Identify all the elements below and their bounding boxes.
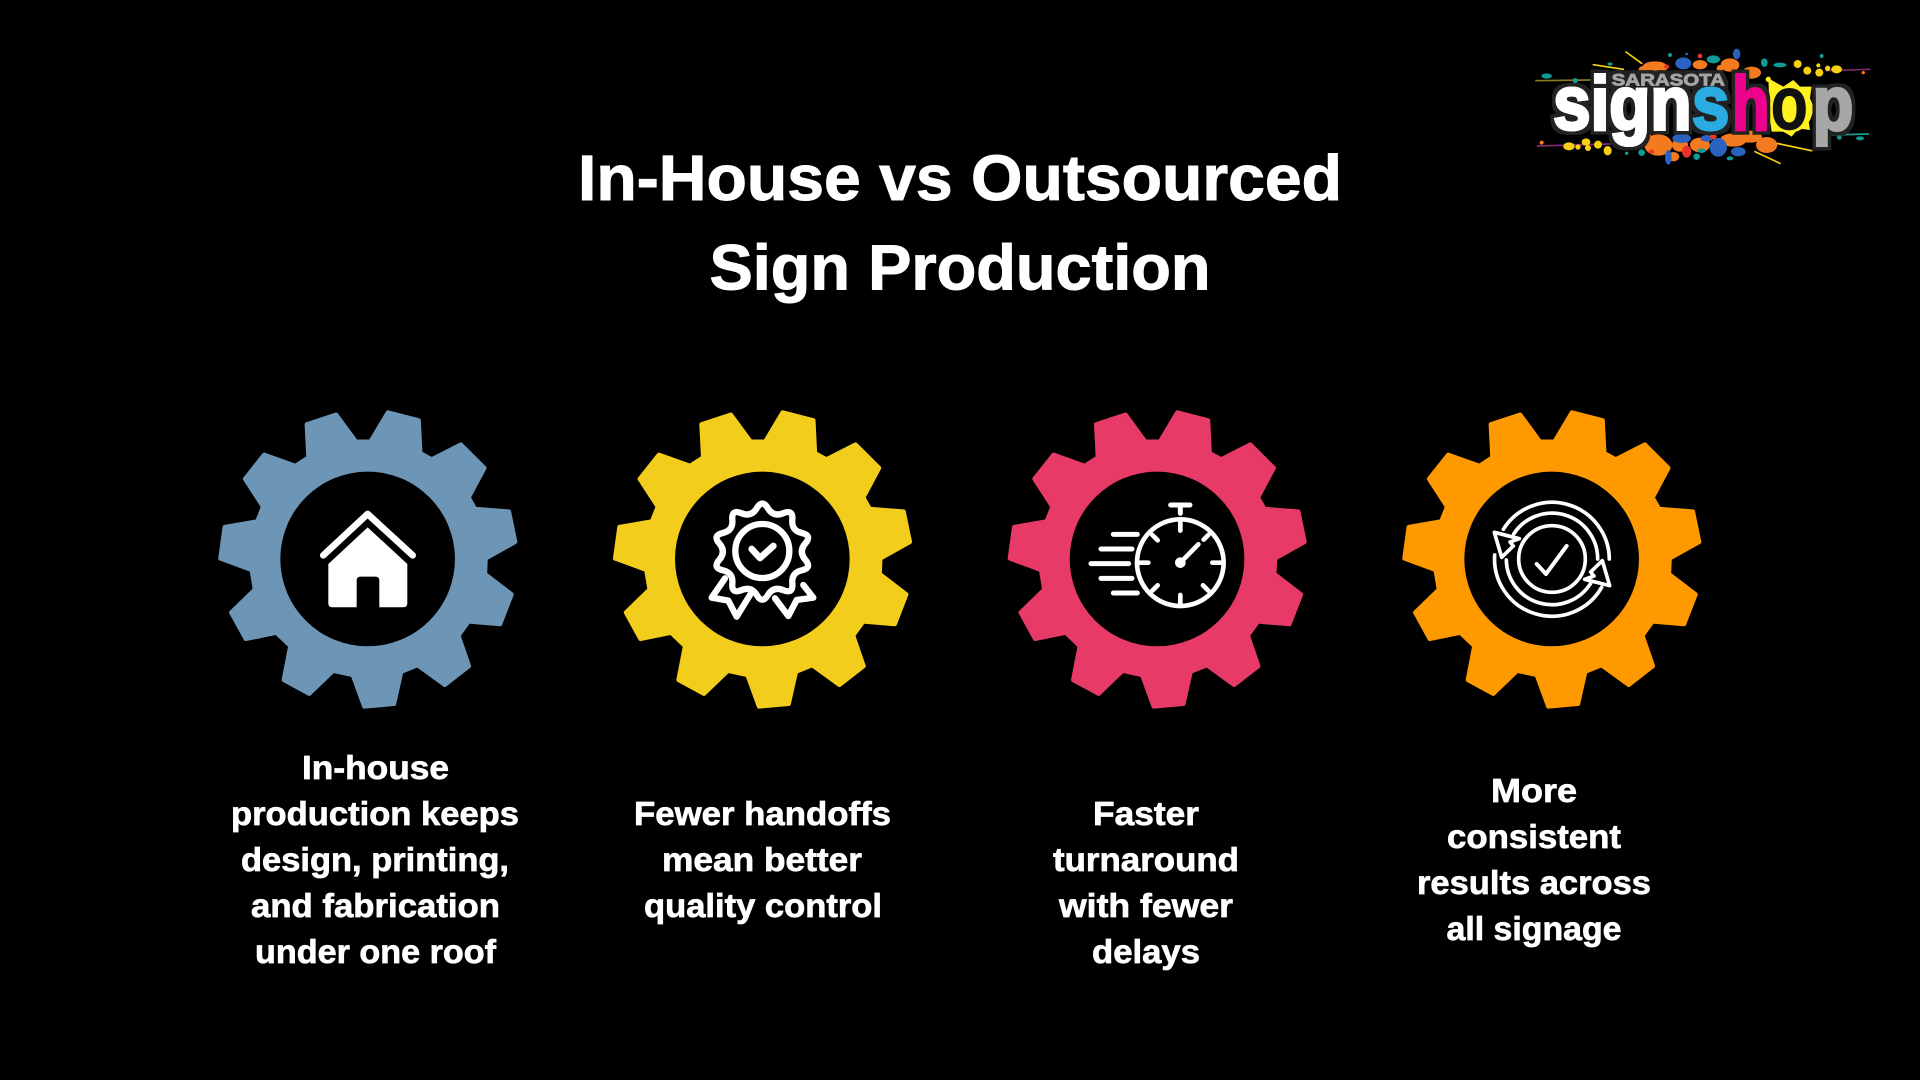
text: consistent results: More — [1491, 772, 1577, 809]
text: consistent results: consistent — [1447, 818, 1621, 855]
logo wordmark: sign — [1553, 63, 1691, 147]
text: faster turnaround — [1053, 795, 1239, 970]
panel: consistent results — [1405, 413, 1699, 947]
title — [578, 142, 1342, 304]
text: in-house production — [231, 749, 519, 970]
icon: stopwatch — [1091, 505, 1224, 606]
text: in-house production: production keeps — [231, 795, 519, 832]
panel: in-house production — [221, 413, 519, 970]
logo wordmark: h — [1732, 63, 1769, 147]
logo yellow splash — [1763, 77, 1815, 137]
text: quality control: mean better — [662, 841, 862, 878]
icon: house — [323, 514, 413, 607]
logo paint splatter — [1536, 49, 1870, 165]
text: quality control: Fewer handoffs — [634, 795, 891, 832]
text: consistent results: results across — [1417, 864, 1651, 901]
icon: award badge — [712, 504, 813, 617]
text: in-house production: design, printing, — [241, 841, 509, 878]
text: faster turnaround: with fewer — [1058, 887, 1233, 924]
text: consistent results: all signage — [1446, 910, 1622, 947]
logo wordmark: SARASOTA — [1612, 70, 1725, 89]
logo wordmark — [1553, 63, 1853, 147]
logo wordmark: p — [1813, 63, 1853, 147]
gear: blue — [221, 413, 515, 706]
text: quality control — [634, 795, 891, 924]
gear: yellow — [615, 413, 910, 706]
title: In-House vs Outsourced — [578, 142, 1342, 214]
gear: orange — [1405, 413, 1699, 706]
icon: cycle with checkmark — [1494, 502, 1610, 616]
logo: Sarasota Sign Shop — [1536, 49, 1870, 165]
title: Sign Production — [710, 232, 1210, 304]
text: faster turnaround: turnaround — [1053, 841, 1239, 878]
text: faster turnaround: Faster — [1093, 795, 1199, 832]
panel: faster turnaround — [1010, 413, 1304, 970]
logo letter o: o — [1771, 63, 1808, 147]
text: in-house production: under one roof — [255, 933, 497, 970]
text: consistent results — [1417, 772, 1651, 947]
text: in-house production: In-house — [302, 749, 449, 786]
text: quality control: quality control — [644, 887, 882, 924]
text: in-house production: and fabrication — [251, 887, 500, 924]
text: faster turnaround: delays — [1092, 933, 1200, 970]
panel: quality control — [615, 413, 910, 924]
logo wordmark: s — [1692, 63, 1729, 147]
gear: pink — [1010, 413, 1304, 706]
